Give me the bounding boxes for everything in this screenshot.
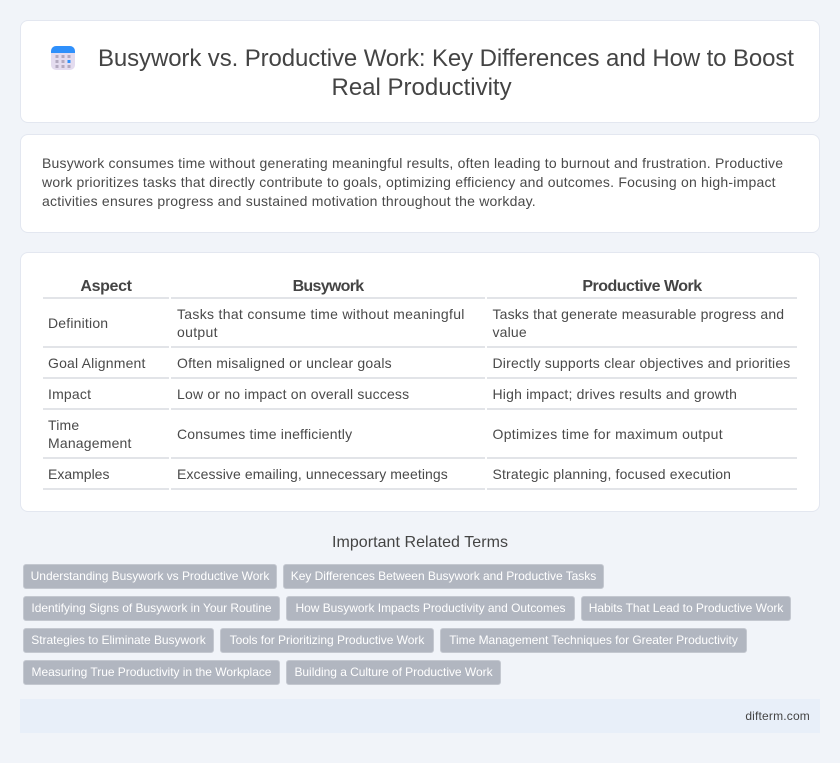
tag (286, 596, 575, 621)
intro paragraph: work prioritizes tasks that directly contribute to goals, optimizing efficiency and outcomes. Focusing on high-impact (42, 174, 776, 190)
row: time management: Consumes time inefficiently (177, 426, 352, 442)
tag: Measuring True Productivity in the Workplace (32, 665, 271, 679)
row: examples (48, 466, 731, 482)
panel: related term tags (23, 564, 791, 685)
row: examples: Excessive emailing, unnecessary meetings (177, 466, 448, 482)
intro paragraph (42, 155, 783, 209)
row: definition: output (177, 324, 218, 340)
row: definition: Definition (48, 315, 108, 331)
panel: title card (20, 20, 820, 123)
title: Busywork vs. Productive Work: Key Differences and How to Boost (98, 45, 794, 72)
tag (440, 628, 747, 653)
tag: Key Differences Between Busywork and Productive Tasks (291, 569, 596, 583)
row: impact (48, 386, 737, 402)
tag (220, 628, 434, 653)
row: impact: Low or no impact on overall success (177, 386, 409, 402)
title (98, 45, 794, 101)
tag (581, 596, 791, 621)
row: goal alignment: Often misaligned or unclear goals (177, 355, 392, 371)
tag: Strategies to Eliminate Busywork (31, 633, 206, 647)
panel: intro text (20, 134, 820, 233)
row: impact: Impact (48, 386, 91, 402)
intro paragraph: activities ensures progress and sustained motivation throughout the workday. (42, 193, 536, 209)
row: goal alignment (48, 355, 790, 371)
panel: comparison table (20, 252, 820, 512)
row: time management: Time (48, 417, 79, 433)
footer bar (20, 699, 820, 733)
footer site name: difterm.com (745, 709, 810, 723)
row: time management: Management (48, 435, 132, 451)
heading: important related terms: Important Related Terms (332, 534, 508, 551)
row: time management (48, 417, 723, 451)
tag (23, 564, 277, 589)
row: definition: Tasks that consume time without meaningful (177, 306, 465, 322)
tag: How Busywork Impacts Productivity and Outcomes (295, 601, 566, 615)
tag (23, 596, 280, 621)
title: Real Productivity (332, 74, 512, 101)
tag: Understanding Busywork vs Productive Work (31, 569, 269, 583)
header: busywork: Busywork (293, 278, 363, 295)
header: aspect: Aspect (80, 278, 132, 295)
tag: Time Management Techniques for Greater Productivity (449, 633, 738, 647)
tag (286, 660, 501, 685)
tag (23, 660, 280, 685)
row: definition: Tasks that generate measurable progress and (492, 306, 784, 322)
tag: Tools for Prioritizing Productive Work (230, 633, 424, 647)
tag (23, 628, 214, 653)
row: goal alignment: Directly supports clear objectives and priorities (492, 355, 790, 371)
tag: Building a Culture of Productive Work (294, 665, 493, 679)
row: time management: Optimizes time for maximum output (492, 426, 723, 442)
tag: Habits That Lead to Productive Work (589, 601, 783, 615)
table header (80, 278, 702, 295)
row: examples: Strategic planning, focused execution (492, 466, 731, 482)
row: definition: value (492, 324, 527, 340)
row: goal alignment: Goal Alignment (48, 355, 146, 371)
row: examples: Examples (48, 466, 109, 482)
tag (283, 564, 604, 589)
icon: calendar (51, 46, 75, 70)
tag: Identifying Signs of Busywork in Your Routine (31, 601, 272, 615)
row: definition (48, 306, 784, 340)
row: impact: High impact; drives results and growth (492, 386, 737, 402)
intro paragraph: Busywork consumes time without generating meaningful results, often leading to burnout and frustration. Productive (42, 155, 783, 171)
header: productive work: Productive Work (582, 278, 702, 295)
